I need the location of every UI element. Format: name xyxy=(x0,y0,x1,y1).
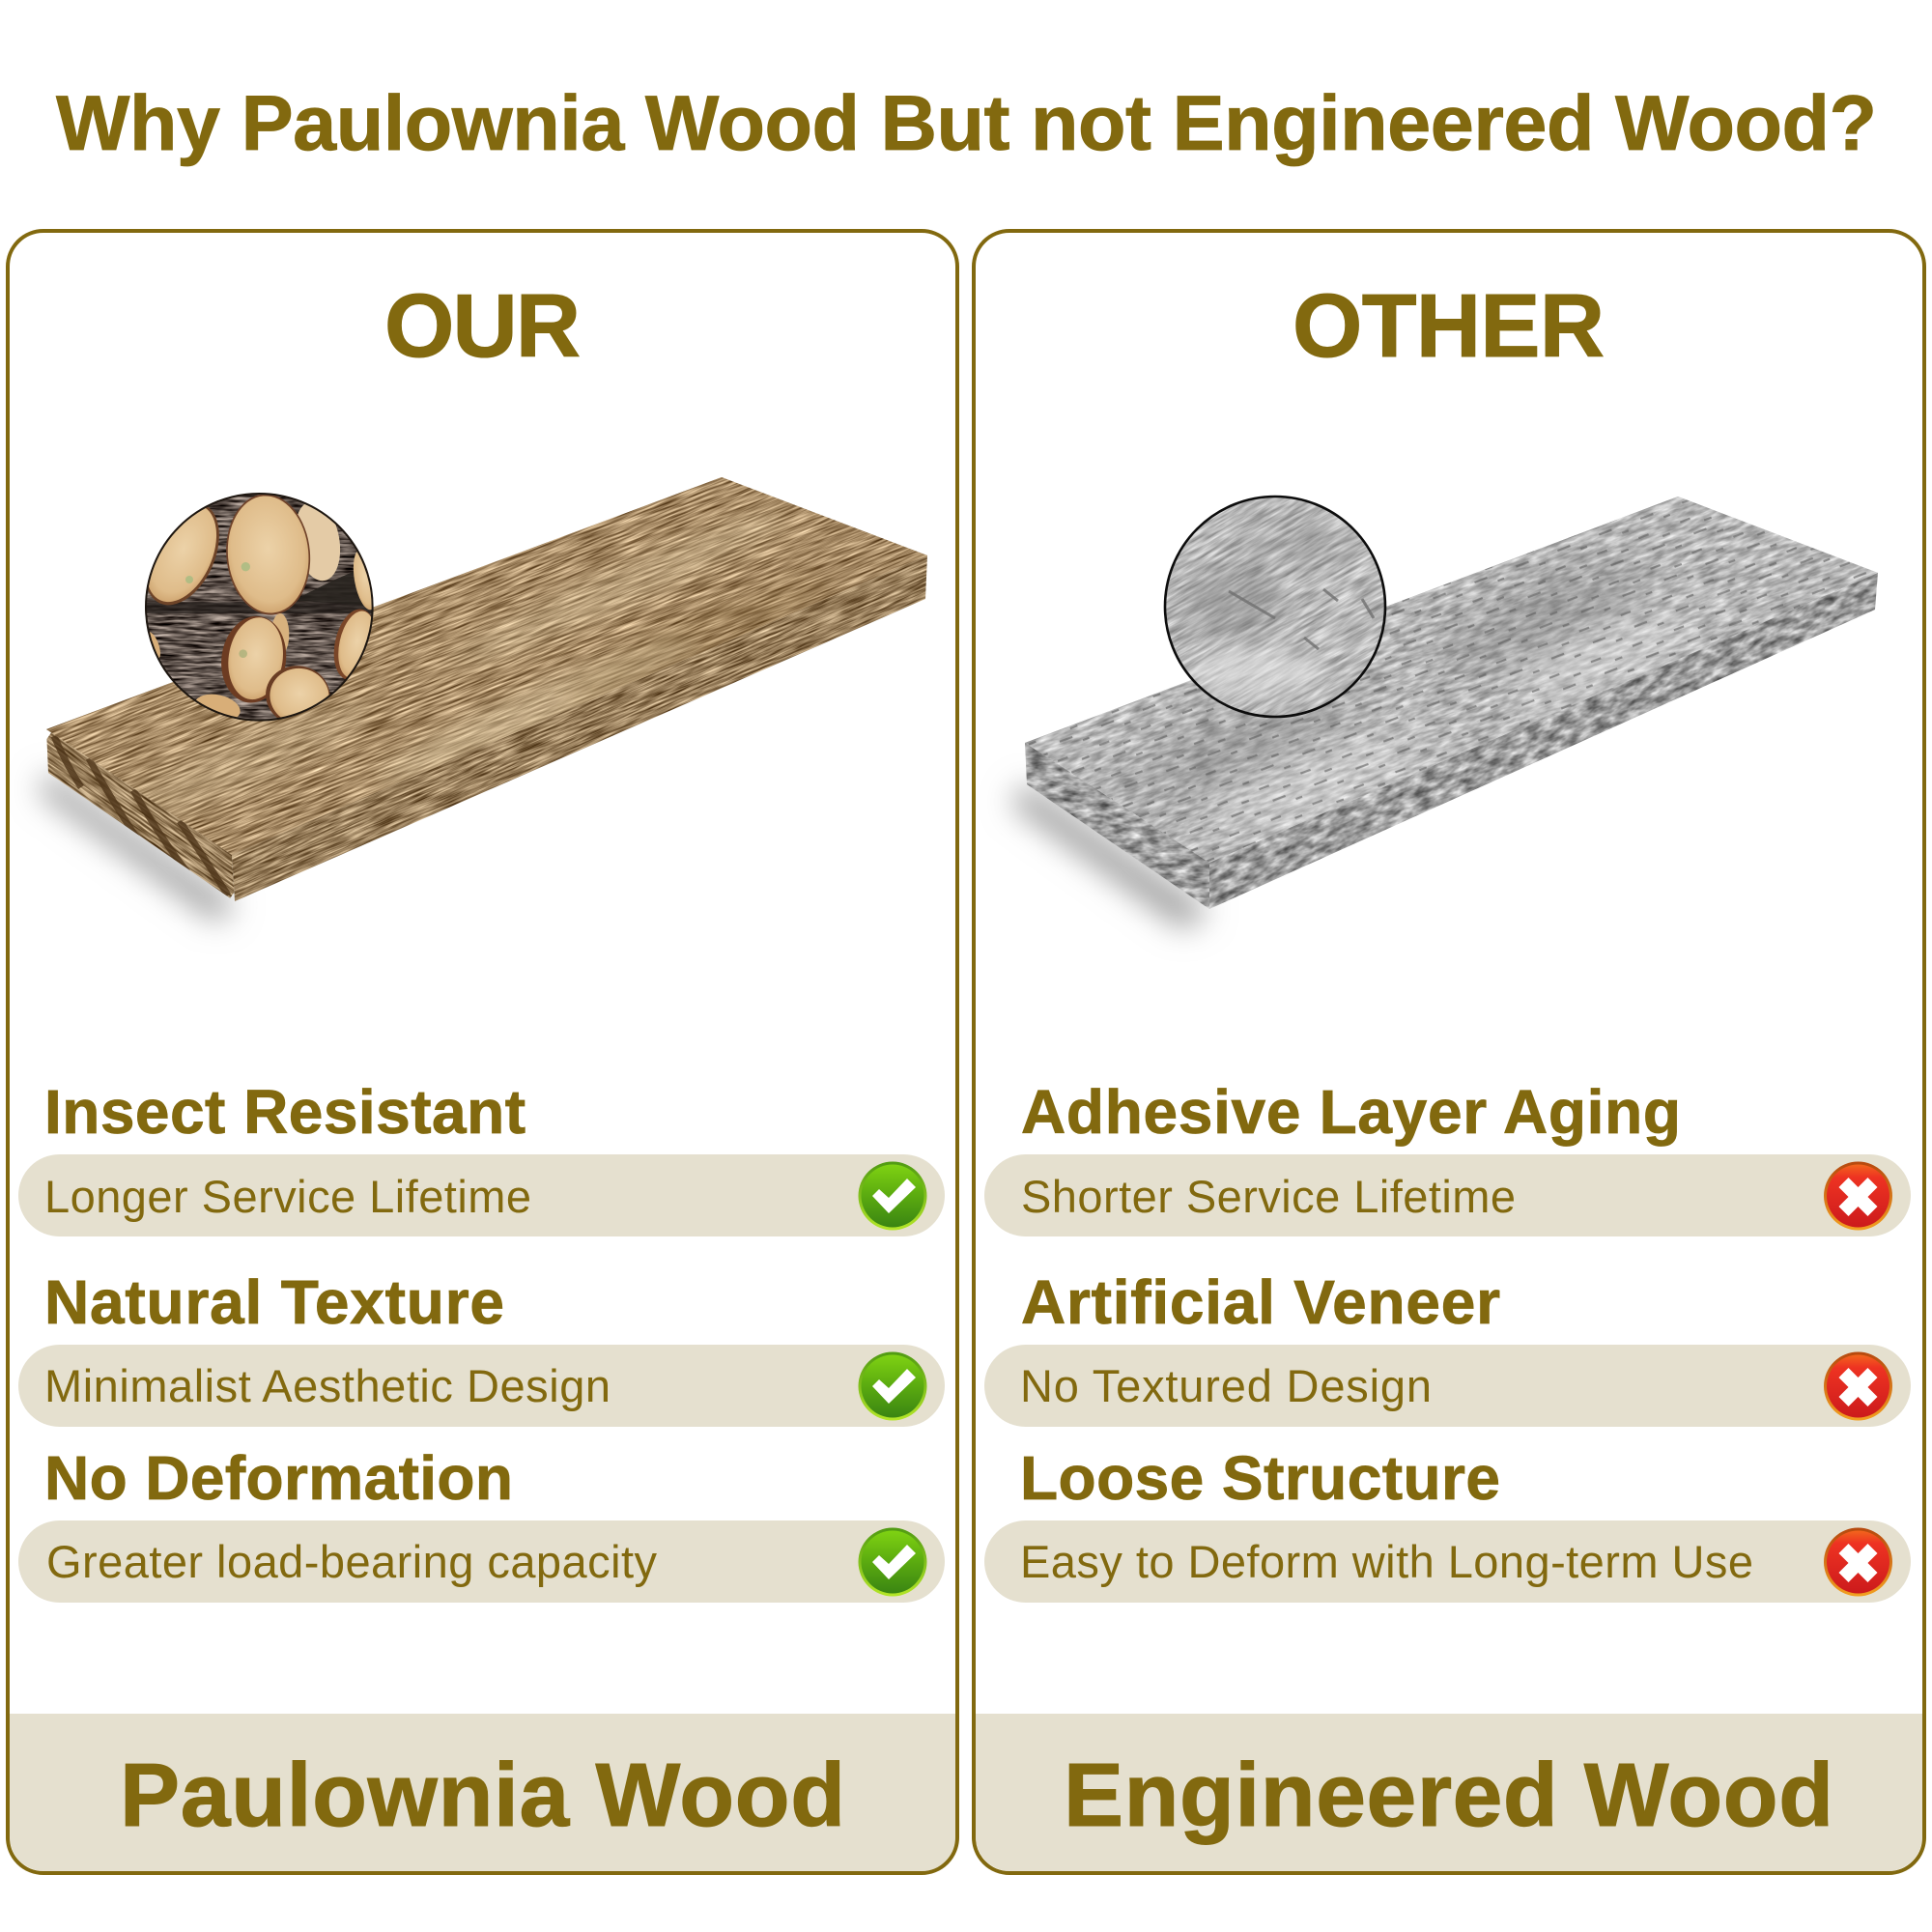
footer label: engineered wood: Engineered Wood xyxy=(1064,1745,1833,1845)
heading: OUR: OUR xyxy=(384,275,581,376)
icon: green check xyxy=(858,1528,927,1596)
heading: OTHER: OTHER xyxy=(1293,275,1605,376)
feature title: Insect Resistant xyxy=(44,1077,526,1147)
footer label: paulownia wood: Paulownia Wood xyxy=(120,1745,845,1845)
feature title: No Deformation xyxy=(44,1443,513,1513)
feature title: Adhesive Layer Aging xyxy=(1021,1077,1681,1147)
pill text: Longer Service Lifetime xyxy=(44,1171,531,1222)
row: artificial veneer xyxy=(984,1267,1911,1427)
pill: no textured design xyxy=(984,1345,1911,1427)
pill text: Shorter Service Lifetime xyxy=(1021,1171,1516,1222)
panel: other engineered wood xyxy=(972,229,1926,1875)
icon: red cross xyxy=(1824,1161,1892,1231)
feature title: Natural Texture xyxy=(44,1267,504,1337)
row: no deformation xyxy=(18,1443,945,1603)
title: Why Paulownia Wood But not Engineered Wood? xyxy=(56,80,1877,167)
feature title: Loose Structure xyxy=(1020,1443,1500,1513)
icon: green check xyxy=(858,1161,927,1231)
pill: easy to deform xyxy=(984,1520,1911,1603)
pill text: No Textured Design xyxy=(1020,1360,1432,1411)
feature title: Artificial Veneer xyxy=(1021,1267,1500,1337)
pill: load-bearing capacity xyxy=(18,1520,945,1603)
panel: our paulownia wood xyxy=(6,229,959,1875)
row: loose structure xyxy=(984,1443,1911,1603)
icon: red cross xyxy=(1824,1352,1892,1420)
icon: green check xyxy=(858,1352,927,1420)
pill: minimalist design xyxy=(18,1345,945,1427)
board: grey engineered plank xyxy=(854,241,1932,1177)
pill: shorter service lifetime xyxy=(984,1154,1911,1236)
panel outline: other xyxy=(974,231,1924,1873)
icon: red cross xyxy=(1824,1528,1892,1596)
pill text: Minimalist Aesthetic Design xyxy=(44,1360,611,1411)
row: insect resistant xyxy=(18,1077,945,1236)
footer band: paulownia xyxy=(10,1714,956,1871)
pill text: Easy to Deform with Long-term Use xyxy=(1020,1536,1753,1587)
icon: stacked logs circle xyxy=(145,493,374,722)
board: natural wood plank xyxy=(27,477,927,935)
row: natural texture xyxy=(18,1267,945,1427)
icon: grey texture magnifier circle xyxy=(1163,495,1387,719)
pill text: Greater load-bearing capacity xyxy=(46,1536,657,1587)
panel outline: our xyxy=(8,231,957,1873)
pill: longer service lifetime xyxy=(18,1154,945,1236)
row: adhesive layer aging xyxy=(984,1077,1911,1236)
footer band: engineered xyxy=(976,1714,1922,1871)
